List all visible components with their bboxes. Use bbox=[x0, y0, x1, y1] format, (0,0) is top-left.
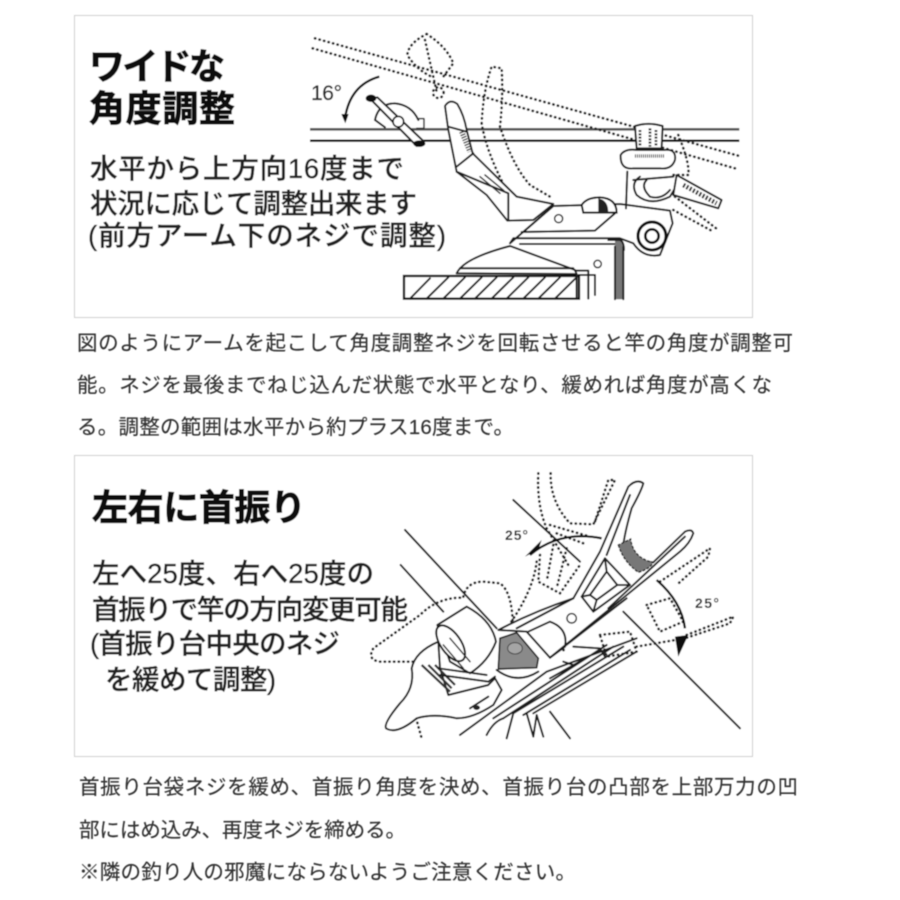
hatch: holder groove bbox=[618, 539, 653, 572]
text block: angle adjustment description: る。調整の範囲は水平から約プラス16度まで。 bbox=[77, 416, 514, 439]
base rails bbox=[460, 614, 637, 738]
icon: rod section bbox=[366, 95, 425, 147]
rod lines bbox=[310, 129, 739, 141]
text block: swing description bbox=[79, 776, 798, 884]
text block: swing summary: 首振りで竿の方向変更可能 bbox=[92, 594, 408, 625]
heading: wide angle adjustment: 角度調整 bbox=[89, 88, 235, 129]
front rod arm bbox=[445, 102, 553, 221]
text block: swing description: 部にはめ込み、再度ネジを締める。 bbox=[79, 819, 406, 842]
rear rod clamp bbox=[621, 124, 722, 232]
text block: swing summary bbox=[90, 558, 408, 695]
label: 16 degrees: 16° bbox=[311, 82, 342, 105]
panel: left and right swing bbox=[74, 456, 752, 756]
text block: adjustment summary: 状況に応じて調整出来ます bbox=[90, 188, 417, 219]
arrow: right 25 degree arc bbox=[657, 580, 688, 657]
clamp base and table bbox=[404, 240, 624, 299]
text block: adjustment summary: (前方アーム下のネジで調整) bbox=[88, 220, 446, 251]
label: 25 degrees right: 25° bbox=[695, 595, 719, 611]
text block: adjustment summary: 水平から上方向16度まで bbox=[90, 153, 404, 184]
text block: angle adjustment description: 図のようにアームを起こして角度調整ネジを回転させると竿の角度が調整可 bbox=[77, 332, 793, 355]
square socket bbox=[582, 558, 630, 612]
heading: wide angle adjustment bbox=[89, 46, 235, 129]
text block: adjustment summary bbox=[88, 153, 446, 251]
panel: wide angle adjustment bbox=[74, 16, 752, 318]
reference axis lines bbox=[401, 500, 740, 738]
grey swivel centre bbox=[497, 633, 538, 678]
heading: left and right swing: 左右に首振り bbox=[92, 487, 306, 528]
dotted raised rod bbox=[313, 34, 739, 197]
heading: wide angle adjustment: ワイドな bbox=[89, 46, 225, 87]
diagram: rod holder side view bbox=[310, 34, 739, 299]
label: 25 degrees left: 25° bbox=[505, 527, 528, 543]
diagram: swing head top view bbox=[371, 473, 740, 738]
arrow: 16 degree arc bbox=[341, 77, 379, 123]
text block: angle adjustment description: 能。ネジを最後までねじ込んだ状態で水平となり、緩めれば角度が高くな bbox=[77, 374, 772, 397]
text block: swing summary: 左へ25度、右へ25度の bbox=[92, 558, 374, 589]
Y-shaped front holder bbox=[498, 481, 693, 658]
dotted swung holders bbox=[371, 473, 733, 738]
left barrel clamp and base bbox=[386, 607, 502, 730]
arm lever and knob bbox=[510, 197, 673, 256]
text block: angle adjustment description bbox=[77, 332, 793, 439]
text block: swing description: 首振り台袋ネジを緩め、首振り角度を決め、首振り台の凸部を上部万力の凹 bbox=[79, 776, 798, 799]
text block: swing summary: を緩めて調整) bbox=[105, 664, 276, 695]
text block: swing description: ※隣の釣り人の邪魔にならないようご注意ください。 bbox=[79, 861, 576, 884]
text block: swing summary: (首振り台中央のネジ bbox=[90, 628, 340, 659]
arrow: left 25 degree arc bbox=[525, 536, 602, 557]
